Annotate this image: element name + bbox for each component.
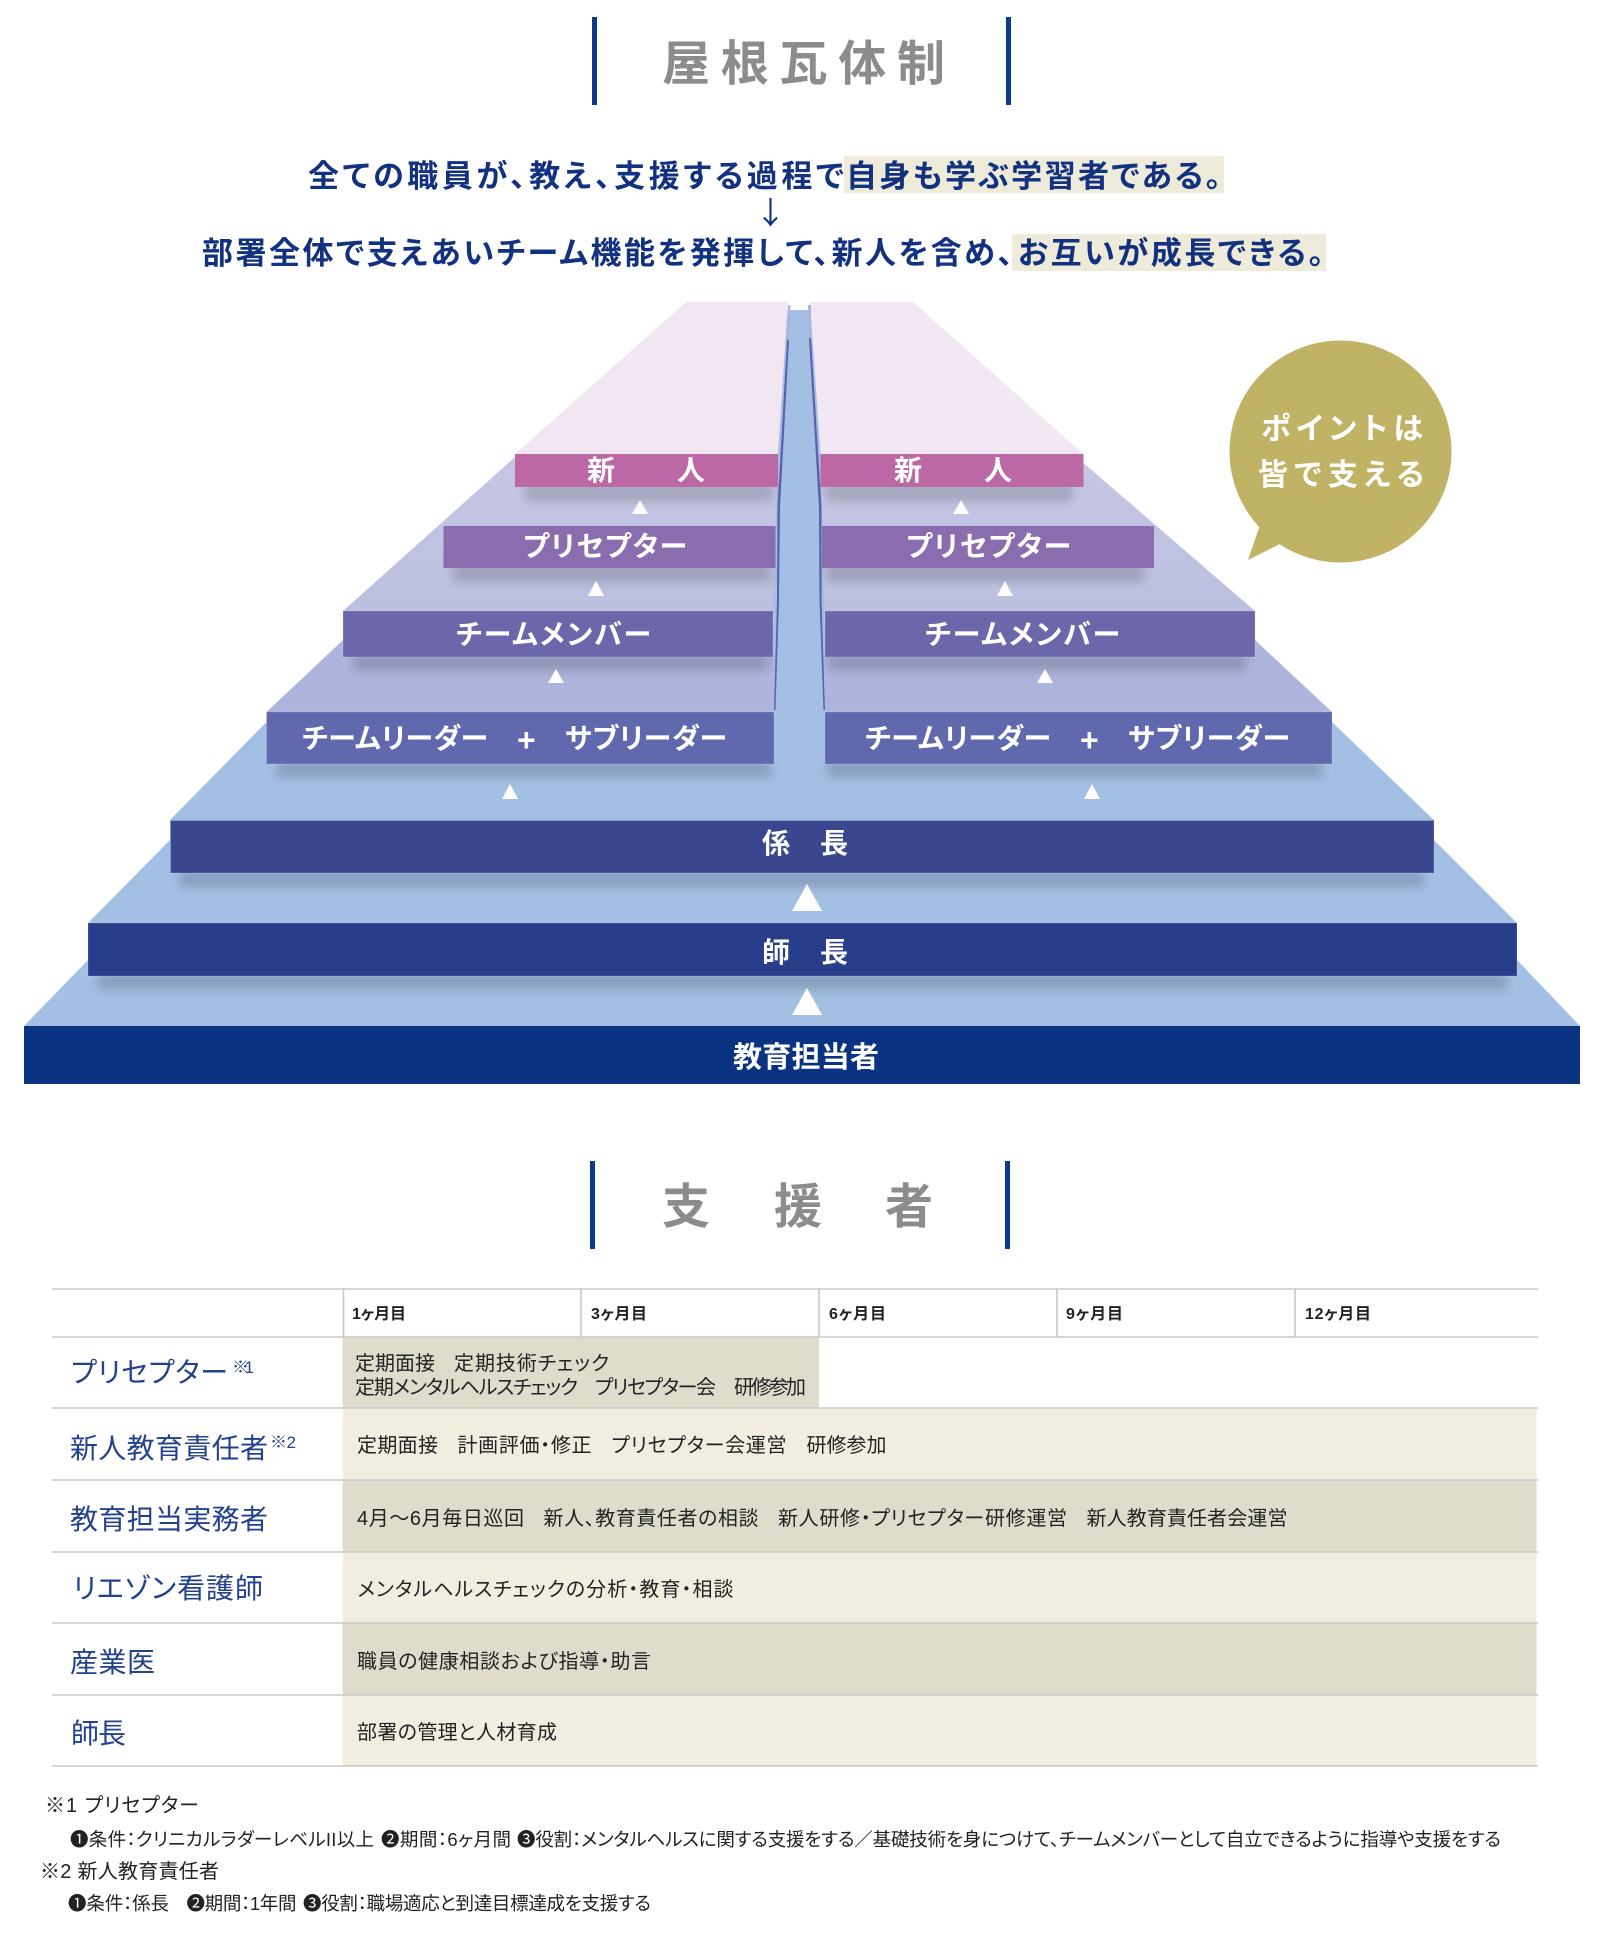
bar: チームリーダー + サブリーダー left: チームリーダー bbox=[302, 722, 488, 754]
team leader level plates bbox=[266, 640, 1332, 712]
row: 教育担当実務者: 新人研修・プリセプター研修運営 bbox=[778, 1507, 1067, 1530]
footnote 2 bbox=[40, 1860, 651, 1914]
month headers: 1ヶ月目 bbox=[352, 1306, 406, 1323]
row: リエゾン看護師 bbox=[73, 1573, 734, 1604]
bar: 教育担当者: 教育担当者 bbox=[733, 1041, 879, 1074]
row: リエゾン看護師: メンタルヘルスチェックの分析・教育・相談 bbox=[358, 1578, 734, 1601]
row: 新人教育責任者: プリセプター会運営 bbox=[612, 1434, 786, 1457]
bar: 新人 left: 新人 bbox=[587, 455, 705, 486]
footnote 1: ※1 プリセプター bbox=[45, 1794, 199, 1817]
row: 師長: 師長 bbox=[71, 1718, 126, 1749]
bar shadows bbox=[98, 483, 1507, 990]
row: プリセプター bbox=[71, 1352, 806, 1399]
inner edge slivers bbox=[774, 305, 825, 710]
row fills bbox=[342, 1337, 1536, 1766]
heading: 支援者: 支援者 bbox=[662, 1181, 933, 1234]
bar: 新人 right: 新人 bbox=[894, 455, 1012, 486]
row: 新人教育責任者: 計画評価・修正 bbox=[458, 1434, 592, 1457]
row: 教育担当実務者 bbox=[70, 1504, 1288, 1535]
row: リエゾン看護師: リエゾン看護師 bbox=[73, 1573, 263, 1604]
row: プリセプター: プリセプター bbox=[71, 1357, 228, 1388]
lavender plates bbox=[343, 457, 1255, 640]
row: プリセプター: 定期メンタルヘルスチェック bbox=[355, 1376, 578, 1399]
row: 教育担当実務者: 4月〜6月毎日巡回 bbox=[357, 1507, 524, 1530]
row: プリセプター: 定期面接 bbox=[355, 1352, 435, 1375]
row: プリセプター: プリセプター会 bbox=[595, 1376, 716, 1399]
bar: 新人 left bbox=[515, 454, 778, 487]
speech bubble: ポイントは皆で支える: 皆で支える bbox=[1258, 459, 1424, 492]
bar: 新人 right bbox=[820, 454, 1084, 487]
bar: プリセプター left bbox=[444, 526, 776, 568]
pink plates bbox=[515, 302, 1084, 454]
bar: 係長 bbox=[170, 820, 1434, 873]
footnote 1: ❸役割：メンタルヘルスに関する支援をする／基礎技術を身につけて、チームメンバーとして自立できるように指導や支援をする bbox=[517, 1829, 1501, 1850]
row: プリセプター: 定期技術チェック bbox=[454, 1352, 609, 1375]
bar: チームメンバー right bbox=[825, 611, 1255, 657]
bar: チームリーダー + サブリーダー right bbox=[825, 712, 1332, 764]
speech bubble: ポイントは皆で支える bbox=[1230, 340, 1452, 562]
bar: チームメンバー left bbox=[343, 611, 773, 657]
row: 教育担当実務者: 新人、教育責任者の相談 bbox=[544, 1507, 758, 1530]
lead message bbox=[202, 156, 1326, 271]
row: 新人教育責任者: 新人教育責任者 bbox=[70, 1433, 268, 1464]
row: プリセプター: ※1 bbox=[232, 1358, 254, 1377]
row: 師長 bbox=[71, 1718, 557, 1749]
row: プリセプター: 研修参加 bbox=[734, 1376, 806, 1399]
bar: チームメンバー right: チームメンバー bbox=[925, 619, 1120, 650]
footnote 1: ❶条件：クリニカルラダーレベルII以上 bbox=[70, 1829, 374, 1850]
bar: 係長: 係長 bbox=[762, 828, 848, 859]
bar: チームリーダー + サブリーダー left: サブリーダー bbox=[565, 722, 727, 754]
month headers: 3ヶ月目 bbox=[591, 1306, 647, 1323]
month headers bbox=[352, 1306, 1371, 1323]
row: 新人教育責任者 bbox=[70, 1433, 886, 1464]
bar: 師長: 師長 bbox=[762, 937, 848, 968]
bar: プリセプター right: プリセプター bbox=[906, 531, 1071, 562]
bar: チームメンバー left: チームメンバー bbox=[456, 619, 651, 650]
row: 産業医: 産業医 bbox=[70, 1647, 155, 1678]
bar: 教育担当者 bbox=[24, 1026, 1580, 1084]
lead message: 全ての職員が、教え、支援する過程で bbox=[308, 159, 844, 194]
lead message: 部署全体で支えあいチーム機能を発揮して、新人を含め、 bbox=[202, 236, 1013, 271]
heading: 支援者 bbox=[590, 1161, 1010, 1249]
row: 新人教育責任者: 定期面接 bbox=[357, 1434, 438, 1457]
row: 産業医: 職員の健康相談および指導・助言 bbox=[357, 1650, 651, 1673]
bar: 師長 bbox=[88, 923, 1517, 976]
footnote 1: ❷期間：6ヶ月間 bbox=[381, 1829, 511, 1850]
footnote 2: ❸役割：職場適応と到達目標達成を支援する bbox=[303, 1893, 651, 1914]
bar: チームリーダー + サブリーダー left: + bbox=[517, 722, 536, 758]
bar: プリセプター right bbox=[822, 526, 1154, 568]
bar: プリセプター left: プリセプター bbox=[523, 531, 687, 562]
month headers: 6ヶ月目 bbox=[829, 1306, 886, 1323]
lead message: 自身も学ぶ学習者である。 bbox=[846, 159, 1221, 194]
row: 新人教育責任者: ※2 bbox=[270, 1433, 296, 1452]
row: 教育担当実務者: 教育担当実務者 bbox=[70, 1504, 268, 1535]
row: 師長: 部署の管理と人材育成 bbox=[357, 1721, 557, 1744]
title: 屋根瓦体制 bbox=[592, 17, 1011, 105]
footnote 2: ※2 新人教育責任者 bbox=[40, 1860, 219, 1883]
title: 屋根瓦体制: 屋根瓦体制 bbox=[662, 38, 945, 91]
footnote 2: ❶条件：係長 bbox=[68, 1893, 169, 1914]
row: 産業医 bbox=[70, 1647, 651, 1678]
center blue strip and base plate bbox=[24, 310, 1580, 1030]
bar: チームリーダー + サブリーダー left bbox=[266, 712, 774, 764]
bar: チームリーダー + サブリーダー right: チームリーダー bbox=[865, 722, 1051, 754]
lead message: お互いが成長できる。 bbox=[1018, 236, 1324, 271]
triangles bbox=[502, 500, 1100, 1015]
bar: チームリーダー + サブリーダー right: + bbox=[1080, 722, 1099, 758]
speech bubble: ポイントは皆で支える: ポイントは bbox=[1261, 413, 1423, 446]
pyramid diagram bbox=[24, 302, 1580, 1084]
month headers: 9ヶ月目 bbox=[1066, 1306, 1123, 1323]
month headers: 12ヶ月目 bbox=[1305, 1306, 1371, 1323]
support table bbox=[52, 1289, 1538, 1766]
footnote 2: ❷期間：1年間 bbox=[186, 1893, 296, 1914]
row: 教育担当実務者: 新人教育責任者会運営 bbox=[1086, 1507, 1288, 1530]
footnote 1 bbox=[45, 1794, 1501, 1850]
bar: チームリーダー + サブリーダー right: サブリーダー bbox=[1128, 722, 1290, 754]
lead message: ↓ bbox=[755, 188, 786, 233]
row: 新人教育責任者: 研修参加 bbox=[806, 1434, 886, 1457]
footnotes bbox=[40, 1794, 1501, 1914]
